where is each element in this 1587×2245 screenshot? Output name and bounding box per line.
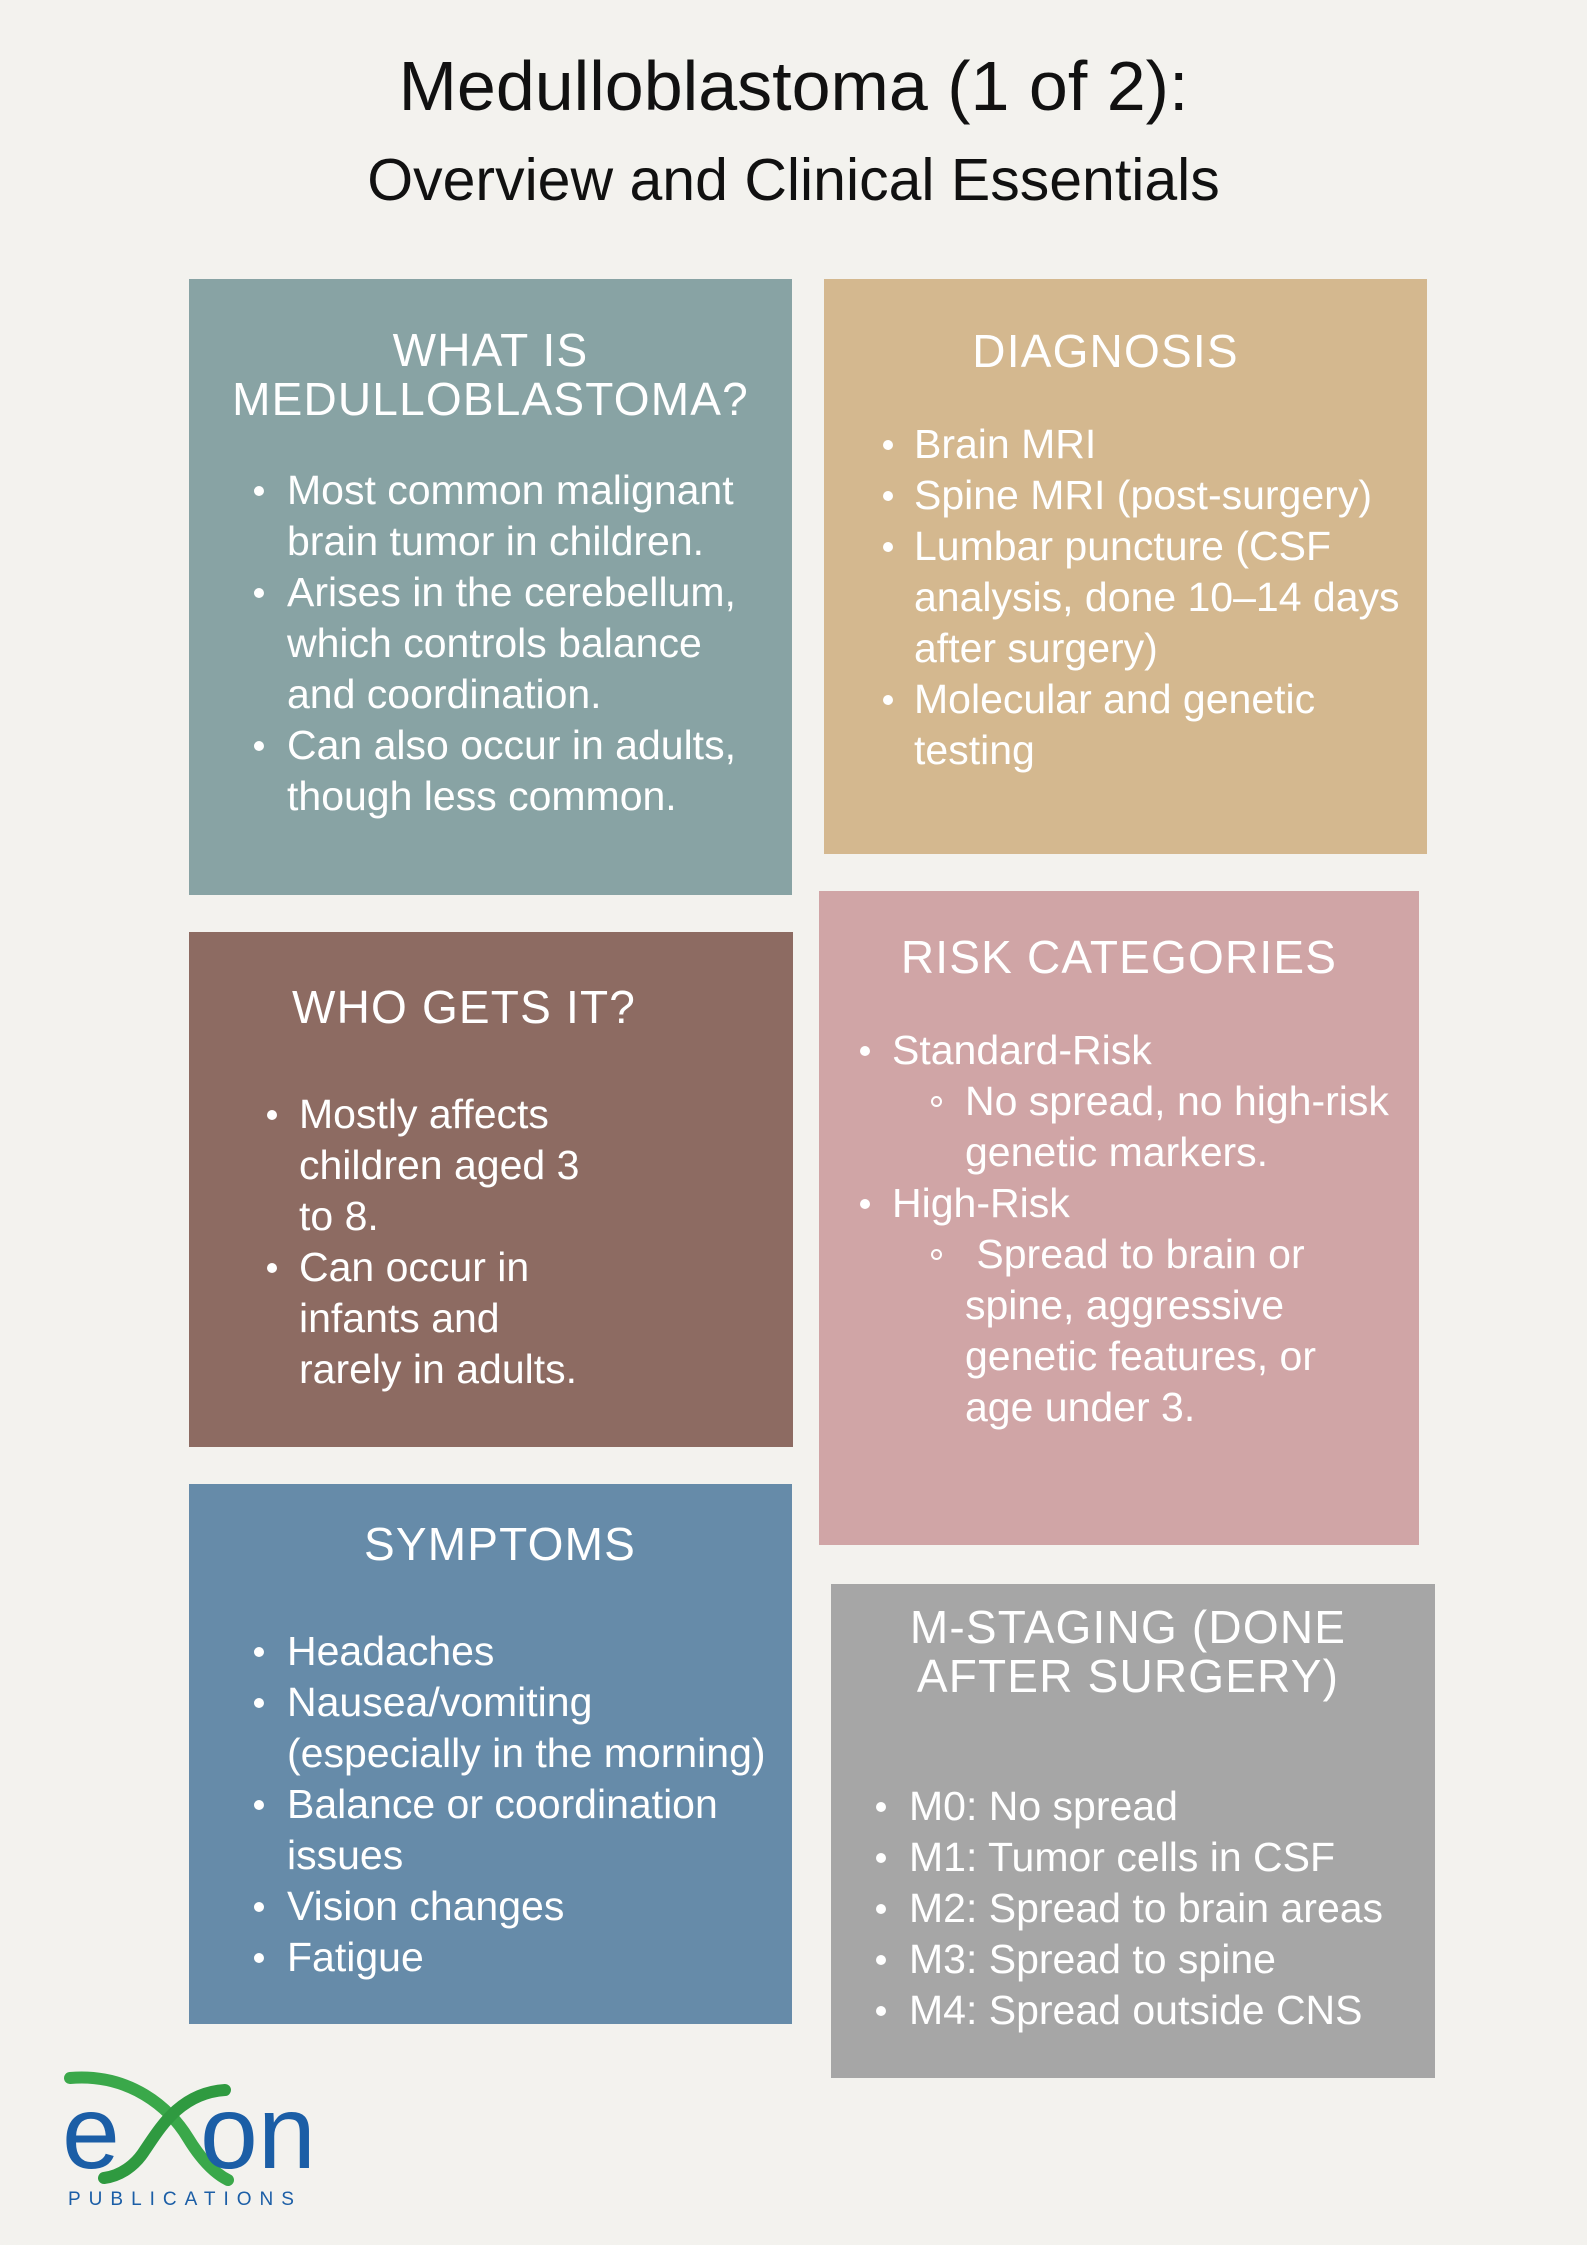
bullets: Can also occur in adults, <box>287 722 736 768</box>
bullets: No spread, no high-risk <box>965 1078 1389 1124</box>
bullets: Spine MRI (post-surgery) <box>914 472 1372 518</box>
panel: m-staging <box>831 1584 1435 2078</box>
logo: exon publications: PUBLICATIONS <box>68 2189 302 2210</box>
bullets <box>254 467 736 819</box>
bullets: Standard-Risk <box>892 1027 1152 1073</box>
bullets: spine, aggressive <box>965 1282 1284 1328</box>
logo: exon publications: e <box>62 2075 120 2191</box>
bullets: Nausea/vomiting <box>287 1679 592 1725</box>
bullets: Arises in the cerebellum, <box>287 569 736 615</box>
heading: WHO GETS IT? <box>292 981 636 1033</box>
bullets: Can occur in <box>299 1244 529 1290</box>
bullets: Lumbar puncture (CSF <box>914 523 1331 569</box>
bullets: M3: Spread to spine <box>909 1936 1276 1982</box>
bullets: M0: No spread <box>909 1783 1178 1829</box>
bullets: analysis, done 10–14 days <box>914 574 1400 620</box>
panel: symptoms <box>189 1484 792 2024</box>
bullets: Balance or coordination <box>287 1781 718 1827</box>
heading: AFTER SURGERY) <box>917 1650 1339 1702</box>
bullets: issues <box>287 1832 403 1878</box>
heading: WHAT IS <box>393 324 588 376</box>
panel: what is medulloblastoma <box>189 279 792 895</box>
heading: SYMPTOMS <box>364 1518 636 1570</box>
heading <box>910 1601 1346 1702</box>
bullets <box>254 1628 766 1980</box>
logo: exon publications: on <box>200 2075 316 2191</box>
bullets <box>860 1027 1389 1430</box>
bullets <box>267 1091 579 1392</box>
bullets: Fatigue <box>287 1934 424 1980</box>
bullets: and coordination. <box>287 671 602 717</box>
panel: diagnosis <box>824 279 1427 854</box>
heading <box>232 324 749 425</box>
bullets <box>883 421 1400 773</box>
bullets: genetic markers. <box>965 1129 1268 1175</box>
bullets <box>876 1783 1383 2033</box>
bullets: brain tumor in children. <box>287 518 704 564</box>
bullets: M4: Spread outside CNS <box>909 1987 1363 2033</box>
bullets: Vision changes <box>287 1883 564 1929</box>
bullets: Most common malignant <box>287 467 734 513</box>
bullets: M2: Spread to brain areas <box>909 1885 1383 1931</box>
heading: DIAGNOSIS <box>972 325 1239 377</box>
bullets: High-Risk <box>892 1180 1070 1226</box>
heading: MEDULLOBLASTOMA? <box>232 373 749 425</box>
bullets: Mostly affects <box>299 1091 549 1137</box>
title: Medulloblastoma (1 of 2): <box>399 47 1188 125</box>
bullets: testing <box>914 727 1035 773</box>
bullets: Brain MRI <box>914 421 1096 467</box>
bullets: though less common. <box>287 773 677 819</box>
bullets: (especially in the morning) <box>287 1730 766 1776</box>
bullets: genetic features, or <box>965 1333 1316 1379</box>
bullets: which controls balance <box>287 620 702 666</box>
heading: M-STAGING (DONE <box>910 1601 1346 1653</box>
panel: who gets it <box>189 932 793 1447</box>
subtitle: Overview and Clinical Essentials <box>367 147 1220 213</box>
bullets: rarely in adults. <box>299 1346 577 1392</box>
bullets: Headaches <box>287 1628 494 1674</box>
bullets: Spread to brain or <box>976 1231 1305 1277</box>
logo: exon publications <box>62 2072 316 2210</box>
bullets: children aged 3 <box>299 1142 579 1188</box>
heading: RISK CATEGORIES <box>901 931 1337 983</box>
panel: risk categories <box>819 891 1419 1545</box>
bullets: age under 3. <box>965 1384 1195 1430</box>
bullets: infants and <box>299 1295 500 1341</box>
bullets: M1: Tumor cells in CSF <box>909 1834 1335 1880</box>
bullets: to 8. <box>299 1193 379 1239</box>
bullets: Molecular and genetic <box>914 676 1315 722</box>
bullets: after surgery) <box>914 625 1158 671</box>
